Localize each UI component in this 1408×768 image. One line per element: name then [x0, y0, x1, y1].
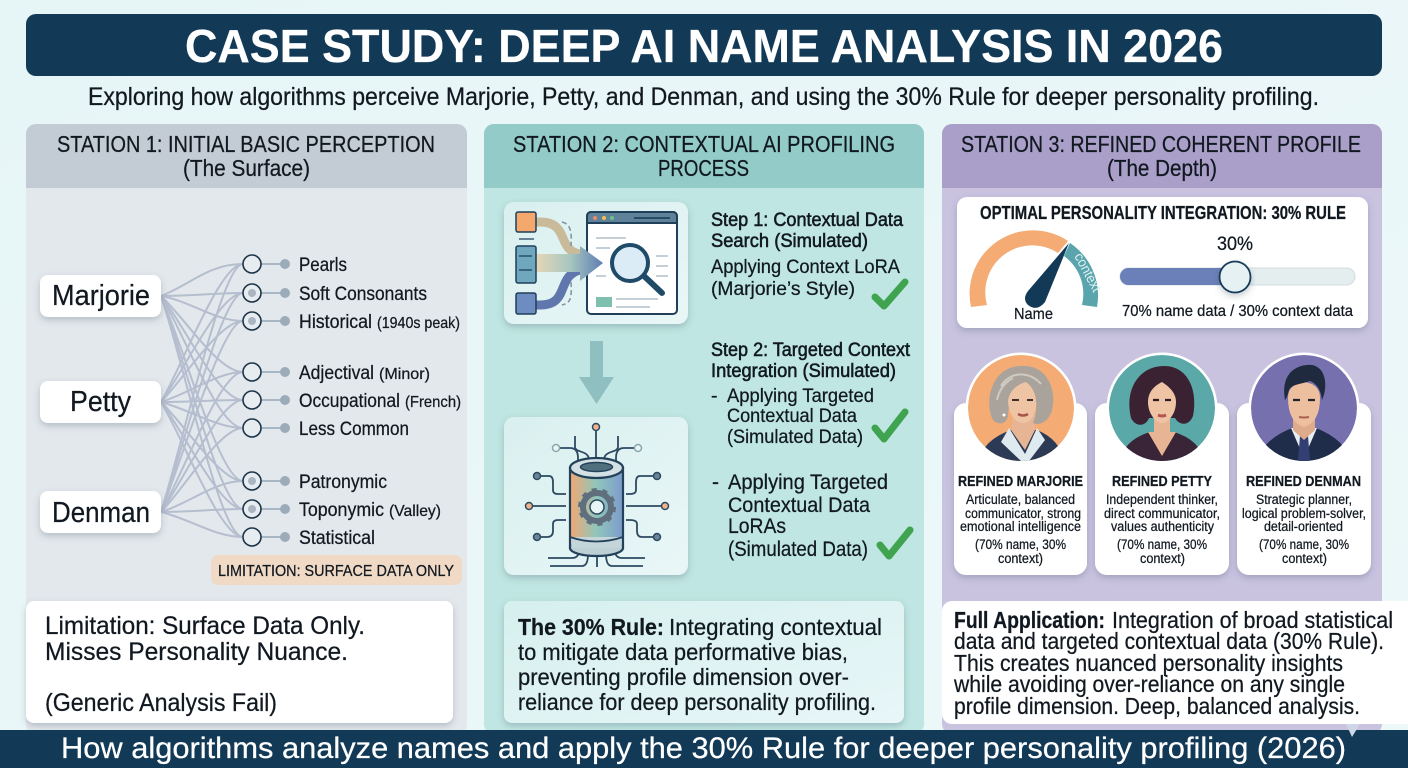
- profile card: refined Petty: [1095, 352, 1229, 575]
- step 2 text: Integration (Simulated): [711, 360, 896, 382]
- profile card: refined Marjorie: emotional intelligence: [960, 519, 1081, 534]
- portrait: Petty: [1106, 352, 1218, 464]
- profile card: refined Marjorie: [954, 352, 1087, 575]
- name connection network lines: [161, 264, 243, 537]
- profile card: refined Marjorie: communicator, strong: [965, 506, 1081, 521]
- attribute node list: (Valley): [389, 503, 441, 520]
- limitation tag: LIMITATION: SURFACE DATA ONLY: [218, 563, 454, 580]
- profile card: refined Denman: REFINED DENMAN: [1246, 473, 1361, 490]
- portrait: Marjorie: [966, 352, 1076, 464]
- attribute node list: (1940s peak): [377, 315, 460, 332]
- station 1 heading: (The Surface): [183, 155, 310, 181]
- profile card: refined Denman: logical problem-solver,: [1242, 506, 1366, 521]
- attribute node list: [243, 255, 461, 549]
- profile card: refined Marjorie: context): [998, 551, 1043, 566]
- name chip: Denman: [40, 491, 161, 533]
- profile card: refined Petty: direct communicator,: [1104, 506, 1220, 521]
- profile card: refined Petty: values authenticity: [1111, 519, 1214, 534]
- step 2 second bullet: Applying Targeted: [728, 471, 888, 494]
- step 2 second bullet: Contextual Data: [728, 494, 870, 517]
- callout: full application: [942, 601, 1408, 737]
- station 1 heading: STATION 1: INITIAL BASIC PERCEPTION: [57, 131, 435, 157]
- station 3 heading: (The Depth): [1107, 155, 1217, 181]
- profile card: refined Marjorie: Articulate, balanced: [966, 492, 1075, 507]
- step 1 text: [711, 209, 903, 300]
- attribute node list: Patronymic: [299, 472, 387, 493]
- profile card: refined Denman: (70% name, 30%: [1259, 537, 1349, 552]
- step 2 text: Applying Targeted: [727, 385, 874, 407]
- step 2 text: [711, 339, 911, 448]
- attribute node list: Statistical: [299, 528, 375, 549]
- attribute node list: Soft Consonants: [299, 284, 427, 305]
- profile card: refined Denman: Strategic planner,: [1256, 492, 1352, 507]
- callout: the 30% rule: The 30% Rule:: [518, 614, 664, 640]
- portrait: Denman: [1248, 352, 1360, 464]
- profile card: refined Petty: (70% name, 30%: [1117, 537, 1207, 552]
- arrow: down: [579, 341, 614, 404]
- icon: data search card: [504, 202, 688, 324]
- limitation callout: Misses Personality Nuance.: [45, 638, 348, 666]
- gauge: context: [1071, 250, 1105, 295]
- limitation tag: [211, 555, 462, 585]
- step 2 text: Contextual Data: [727, 405, 857, 427]
- panel: station 1 initial basic perception: [26, 124, 467, 734]
- attribute node list: Pearls: [299, 255, 347, 276]
- step 2 second bullet: -: [712, 471, 719, 494]
- slider: [1120, 234, 1355, 320]
- name chip: Marjorie: Marjorie: [52, 280, 150, 312]
- callout: the 30% rule: Integrating contextual: [669, 614, 882, 640]
- step 1 text: Search (Simulated): [711, 230, 868, 252]
- station 1 heading: [26, 124, 467, 188]
- name chip: Petty: [40, 381, 161, 423]
- profile card: refined Marjorie: REFINED MARJORIE: [958, 473, 1083, 490]
- footer banner: How algorithms analyze names and apply the 30% Rule for deeper personality profiling (2026): [61, 732, 1346, 765]
- step 2 second bullet: [712, 471, 888, 561]
- name chip: Denman: Denman: [52, 497, 150, 529]
- step 1 text: Step 1: Contextual Data: [711, 209, 903, 231]
- subtitle: Exploring how algorithms perceive Marjorie, Petty, and Denman, and using the 30% Rule for deeper personality profiling.: [88, 83, 1319, 111]
- profile card: refined Petty: REFINED PETTY: [1112, 473, 1212, 490]
- station 2 heading: STATION 2: CONTEXTUAL AI PROFILING: [513, 131, 895, 157]
- panel: station 3 refined coherent profile: [942, 124, 1382, 734]
- attribute node list: Adjectival: [299, 363, 374, 384]
- limitation callout: [26, 601, 453, 723]
- title banner: CASE STUDY: DEEP AI NAME ANALYSIS IN 2026: [185, 20, 1223, 72]
- gauge: [970, 230, 1105, 323]
- step 2 second bullet: (Simulated Data): [728, 538, 868, 561]
- step 2 text: (Simulated Data): [727, 426, 863, 448]
- step 1 text: (Marjorie’s Style): [711, 278, 855, 300]
- panel: station 2 contextual AI profiling: [484, 124, 924, 734]
- callout: the 30% rule: to mitigate data performative bias,: [518, 639, 848, 665]
- step 2 second bullet: LoRAs: [728, 515, 786, 538]
- icon: database with circuit card: [504, 417, 688, 575]
- callout: the 30% rule: preventing profile dimension over-: [518, 664, 849, 690]
- station 2 heading: [484, 124, 924, 188]
- icon: checkmark 2: [875, 412, 905, 439]
- attribute node list: Historical: [299, 312, 372, 333]
- profile card: refined Marjorie: (70% name, 30%: [975, 537, 1066, 552]
- attribute node list: (Minor): [379, 366, 430, 383]
- name chip: Petty: Petty: [70, 386, 131, 418]
- limitation callout: Limitation: Surface Data Only.: [45, 612, 365, 640]
- callout: full application: Full Application:: [954, 607, 1105, 633]
- title banner: [26, 14, 1382, 76]
- profile card: refined Denman: [1237, 352, 1371, 575]
- step 2 text: Step 2: Targeted Context: [711, 339, 911, 361]
- callout: full application: profile dimension. Deep, balanced analysis.: [954, 693, 1360, 719]
- slider: 70% name data / 30% context data: [1122, 303, 1353, 320]
- slider: 30%: [1217, 234, 1253, 255]
- step 1 text: Applying Context LoRA: [711, 256, 900, 278]
- callout: the 30% rule: [504, 601, 904, 723]
- icon: checkmark 3: [880, 530, 910, 556]
- profile card: refined Denman: context): [1282, 551, 1327, 566]
- attribute node list: Toponymic: [299, 500, 384, 521]
- station 3 heading: [942, 124, 1382, 188]
- name chip: Marjorie: [40, 275, 161, 317]
- callout: the 30% rule: reliance for deep personality profiling.: [518, 689, 876, 715]
- card: optimal personality integration: [957, 197, 1368, 328]
- profile card: refined Petty: Independent thinker,: [1106, 492, 1218, 507]
- attribute node list: Less Common: [299, 419, 409, 440]
- profile card: refined Denman: detail-oriented: [1264, 519, 1343, 534]
- station 2 heading: PROCESS: [658, 155, 749, 181]
- profile card: refined Petty: context): [1140, 551, 1185, 566]
- attribute node list: Occupational: [299, 391, 400, 412]
- callout: full application: Integration of broad statistical: [1112, 607, 1393, 633]
- limitation callout: (Generic Analysis Fail): [45, 689, 277, 717]
- callout: full application: This creates nuanced personality insights: [954, 650, 1343, 676]
- attribute node list: (French): [405, 394, 461, 411]
- gauge: Name: [1014, 306, 1053, 323]
- callout: full application: while avoiding over-reliance on any single: [953, 671, 1345, 697]
- step 2 text: -: [711, 385, 718, 407]
- icon: checkmark 1: [875, 282, 905, 306]
